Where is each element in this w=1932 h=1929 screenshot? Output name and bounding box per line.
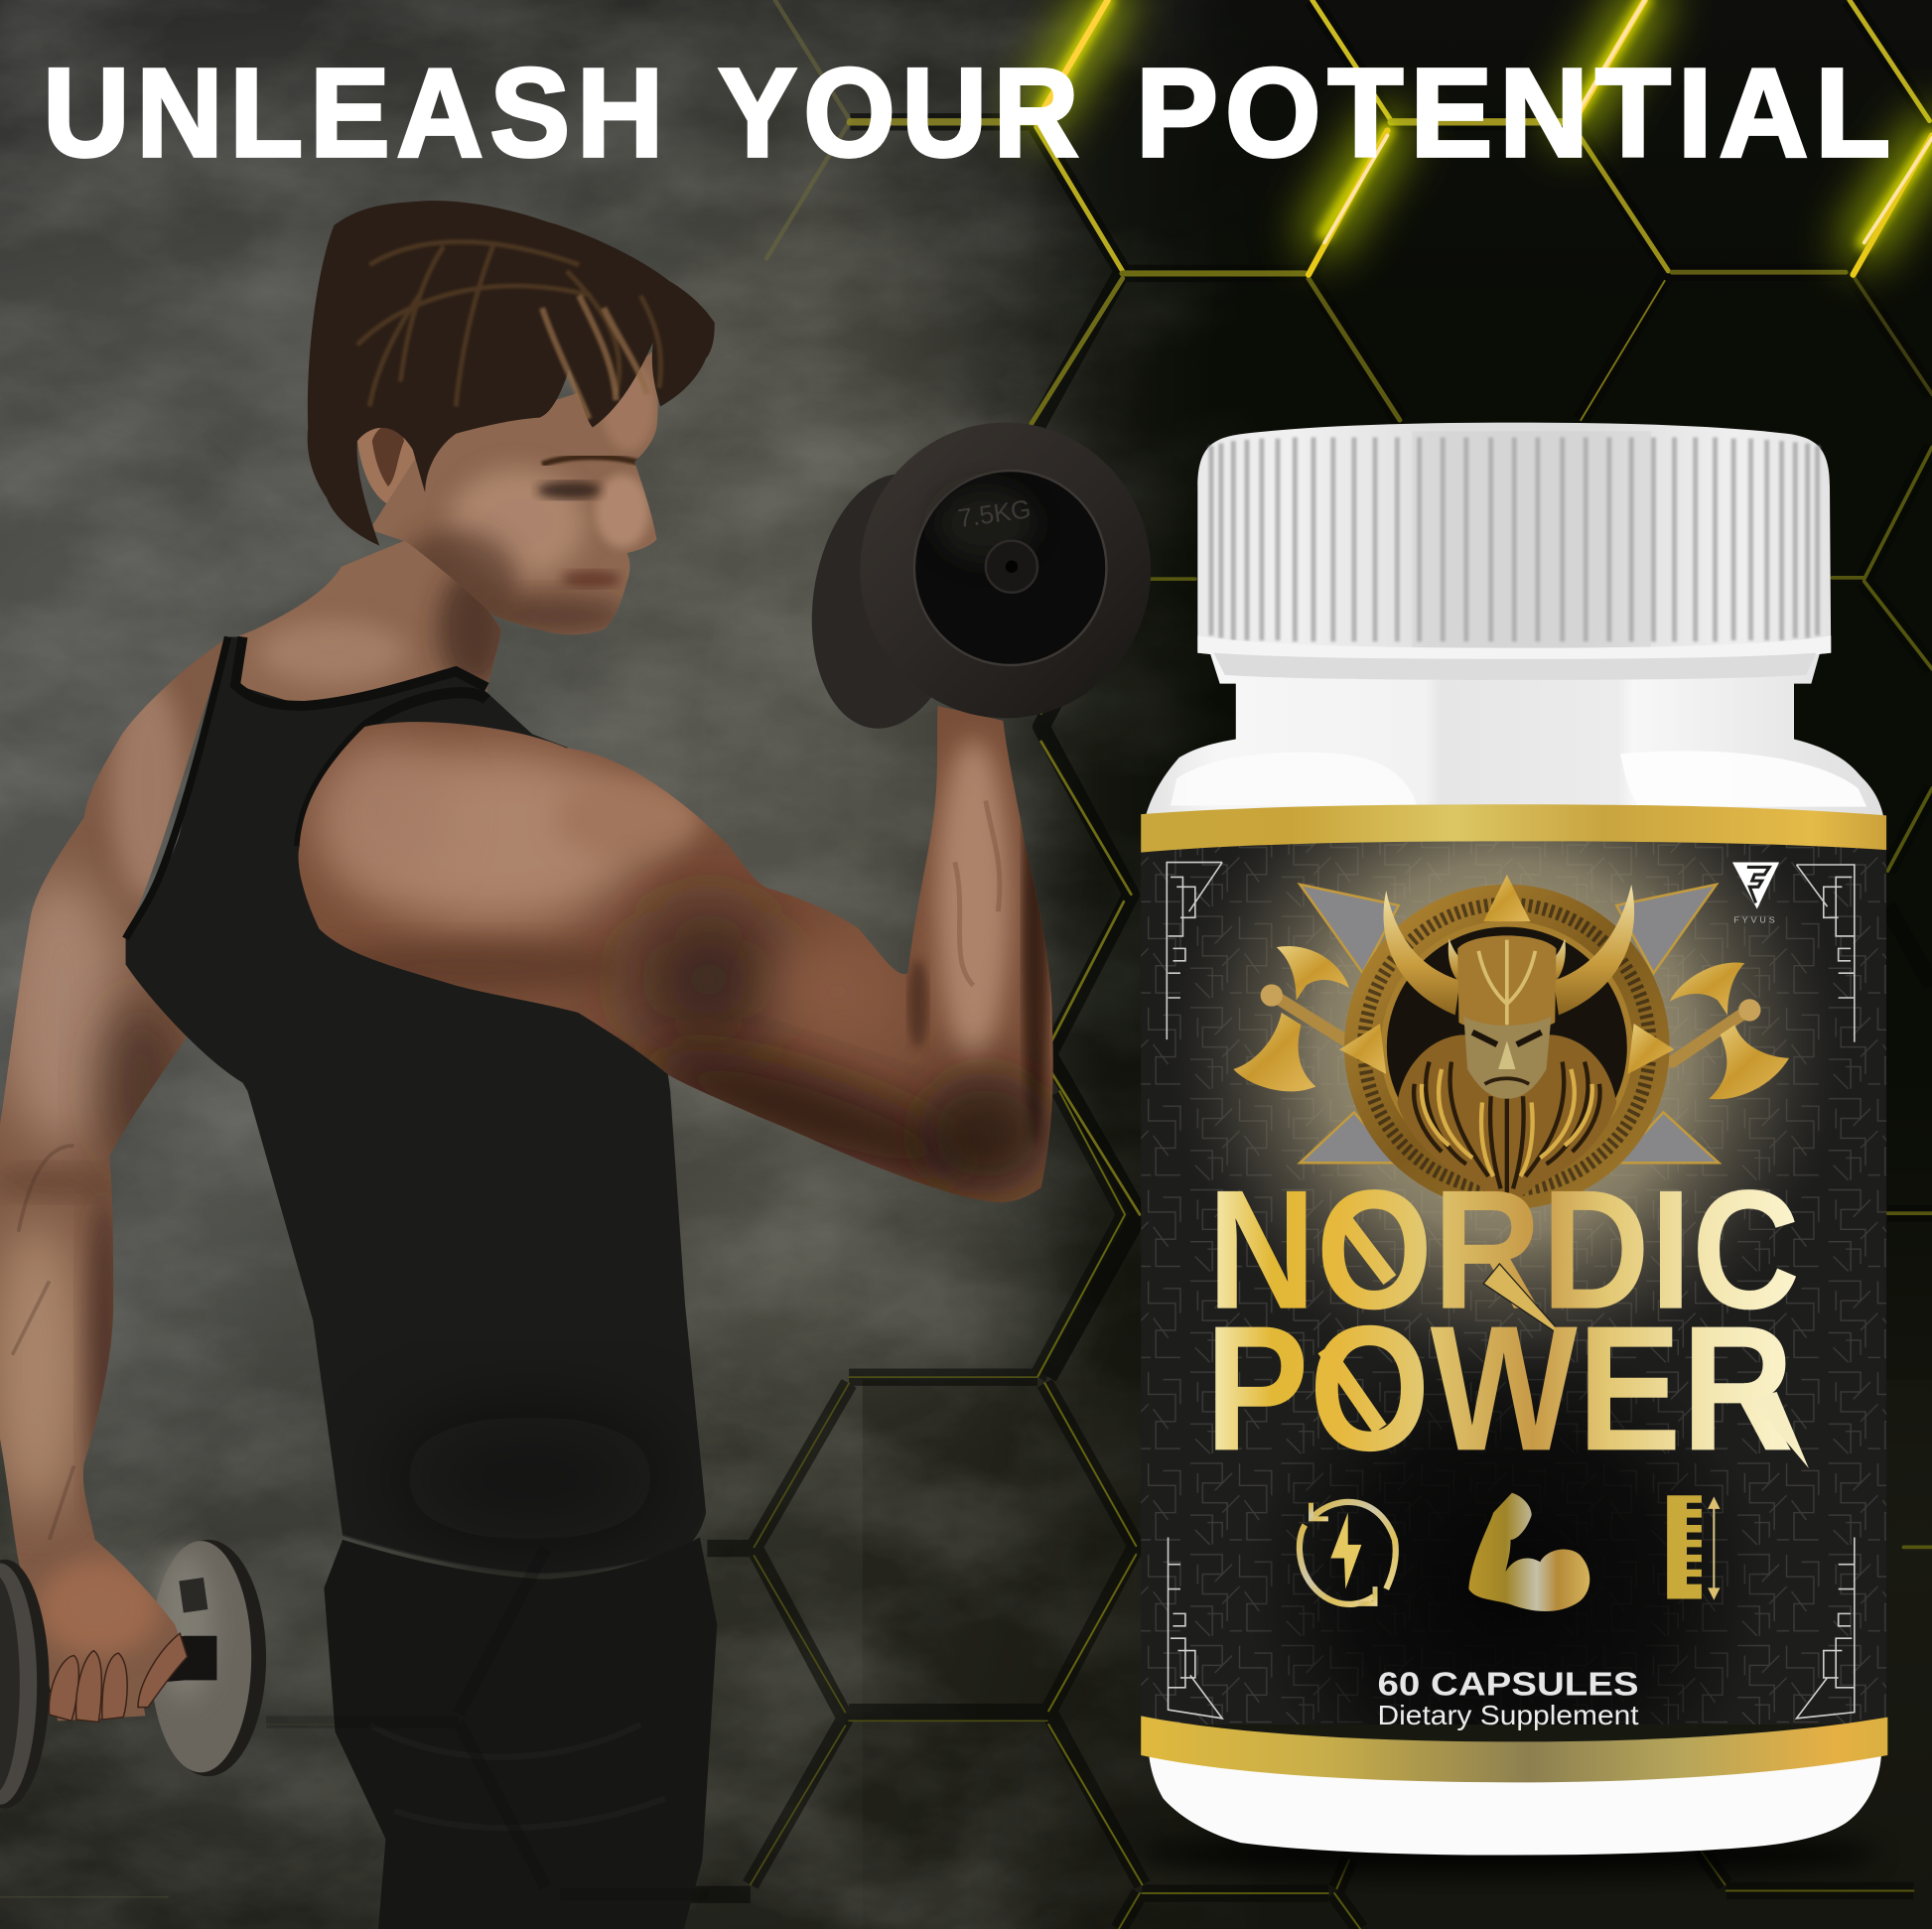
brand logo FV: FYVUS xyxy=(1733,914,1778,924)
hair xyxy=(308,201,715,546)
black shorts xyxy=(324,1537,717,1929)
title: UNLEASH xyxy=(43,42,670,183)
black printed label xyxy=(1141,838,1886,1724)
brand logo FV xyxy=(1732,863,1779,924)
lower dumbbell: rear plate xyxy=(43,1540,266,1776)
title: POTENTIAL xyxy=(1136,42,1897,183)
viking horns xyxy=(1384,885,1634,1015)
smoke texture xyxy=(0,0,1184,1929)
product name POWER: POWER xyxy=(1205,1289,1794,1488)
product bottle xyxy=(1140,423,1887,1876)
medallion side spikes xyxy=(1339,875,1675,1074)
viking beard and flowing hair xyxy=(1397,1034,1616,1199)
viking helmet and face xyxy=(1457,935,1556,1099)
label corner ornaments xyxy=(1167,863,1855,1719)
glowing neon hexagon edges xyxy=(1036,0,1932,275)
supplement descriptor: Dietary Supplement xyxy=(1378,1700,1639,1730)
upper dumbbell with 7.5 kg plate xyxy=(796,423,1151,739)
right battle axe xyxy=(1670,963,1789,1099)
icon: energy bolt in refresh circle xyxy=(1300,1502,1396,1604)
right arm, flexed bicep xyxy=(299,706,1053,1205)
bottle lower body xyxy=(1149,1749,1881,1856)
gold band bottom xyxy=(1141,1716,1887,1782)
hexagon wall: grooves xyxy=(561,0,1932,1929)
product name NORDIC: NORDIC xyxy=(1207,1156,1800,1345)
capsule count: 60 CAPSULES xyxy=(1378,1666,1639,1703)
bottle neck ring xyxy=(1144,653,1885,825)
fingers xyxy=(49,1633,188,1722)
face xyxy=(369,351,658,635)
icon: ruler with height arrow xyxy=(1667,1495,1721,1600)
title: YOUR xyxy=(719,42,1085,183)
man lifting dumbbells xyxy=(0,201,1151,1929)
crossed grey blades behind the medallion xyxy=(1300,885,1719,1163)
white ribbed cap xyxy=(1197,423,1831,680)
lower dumbbell: front plate xyxy=(0,1560,50,1808)
faint hexagon lines showing through the shorts xyxy=(266,1549,709,1894)
black tank top xyxy=(126,636,706,1575)
bottle shoulder highlights xyxy=(1171,753,1417,805)
viking medallion xyxy=(1339,875,1675,1209)
left arm, hanging xyxy=(0,636,228,1722)
left battle axe xyxy=(1233,946,1349,1091)
icon: flexed muscle arm xyxy=(1468,1493,1589,1611)
ear xyxy=(357,408,420,507)
title xyxy=(43,42,1897,183)
upper dumbbell with 7.5 kg plate: 7.5KG xyxy=(956,493,1033,533)
neck xyxy=(236,541,501,701)
gold band top xyxy=(1141,804,1886,853)
ground shadow xyxy=(1140,1832,1879,1876)
